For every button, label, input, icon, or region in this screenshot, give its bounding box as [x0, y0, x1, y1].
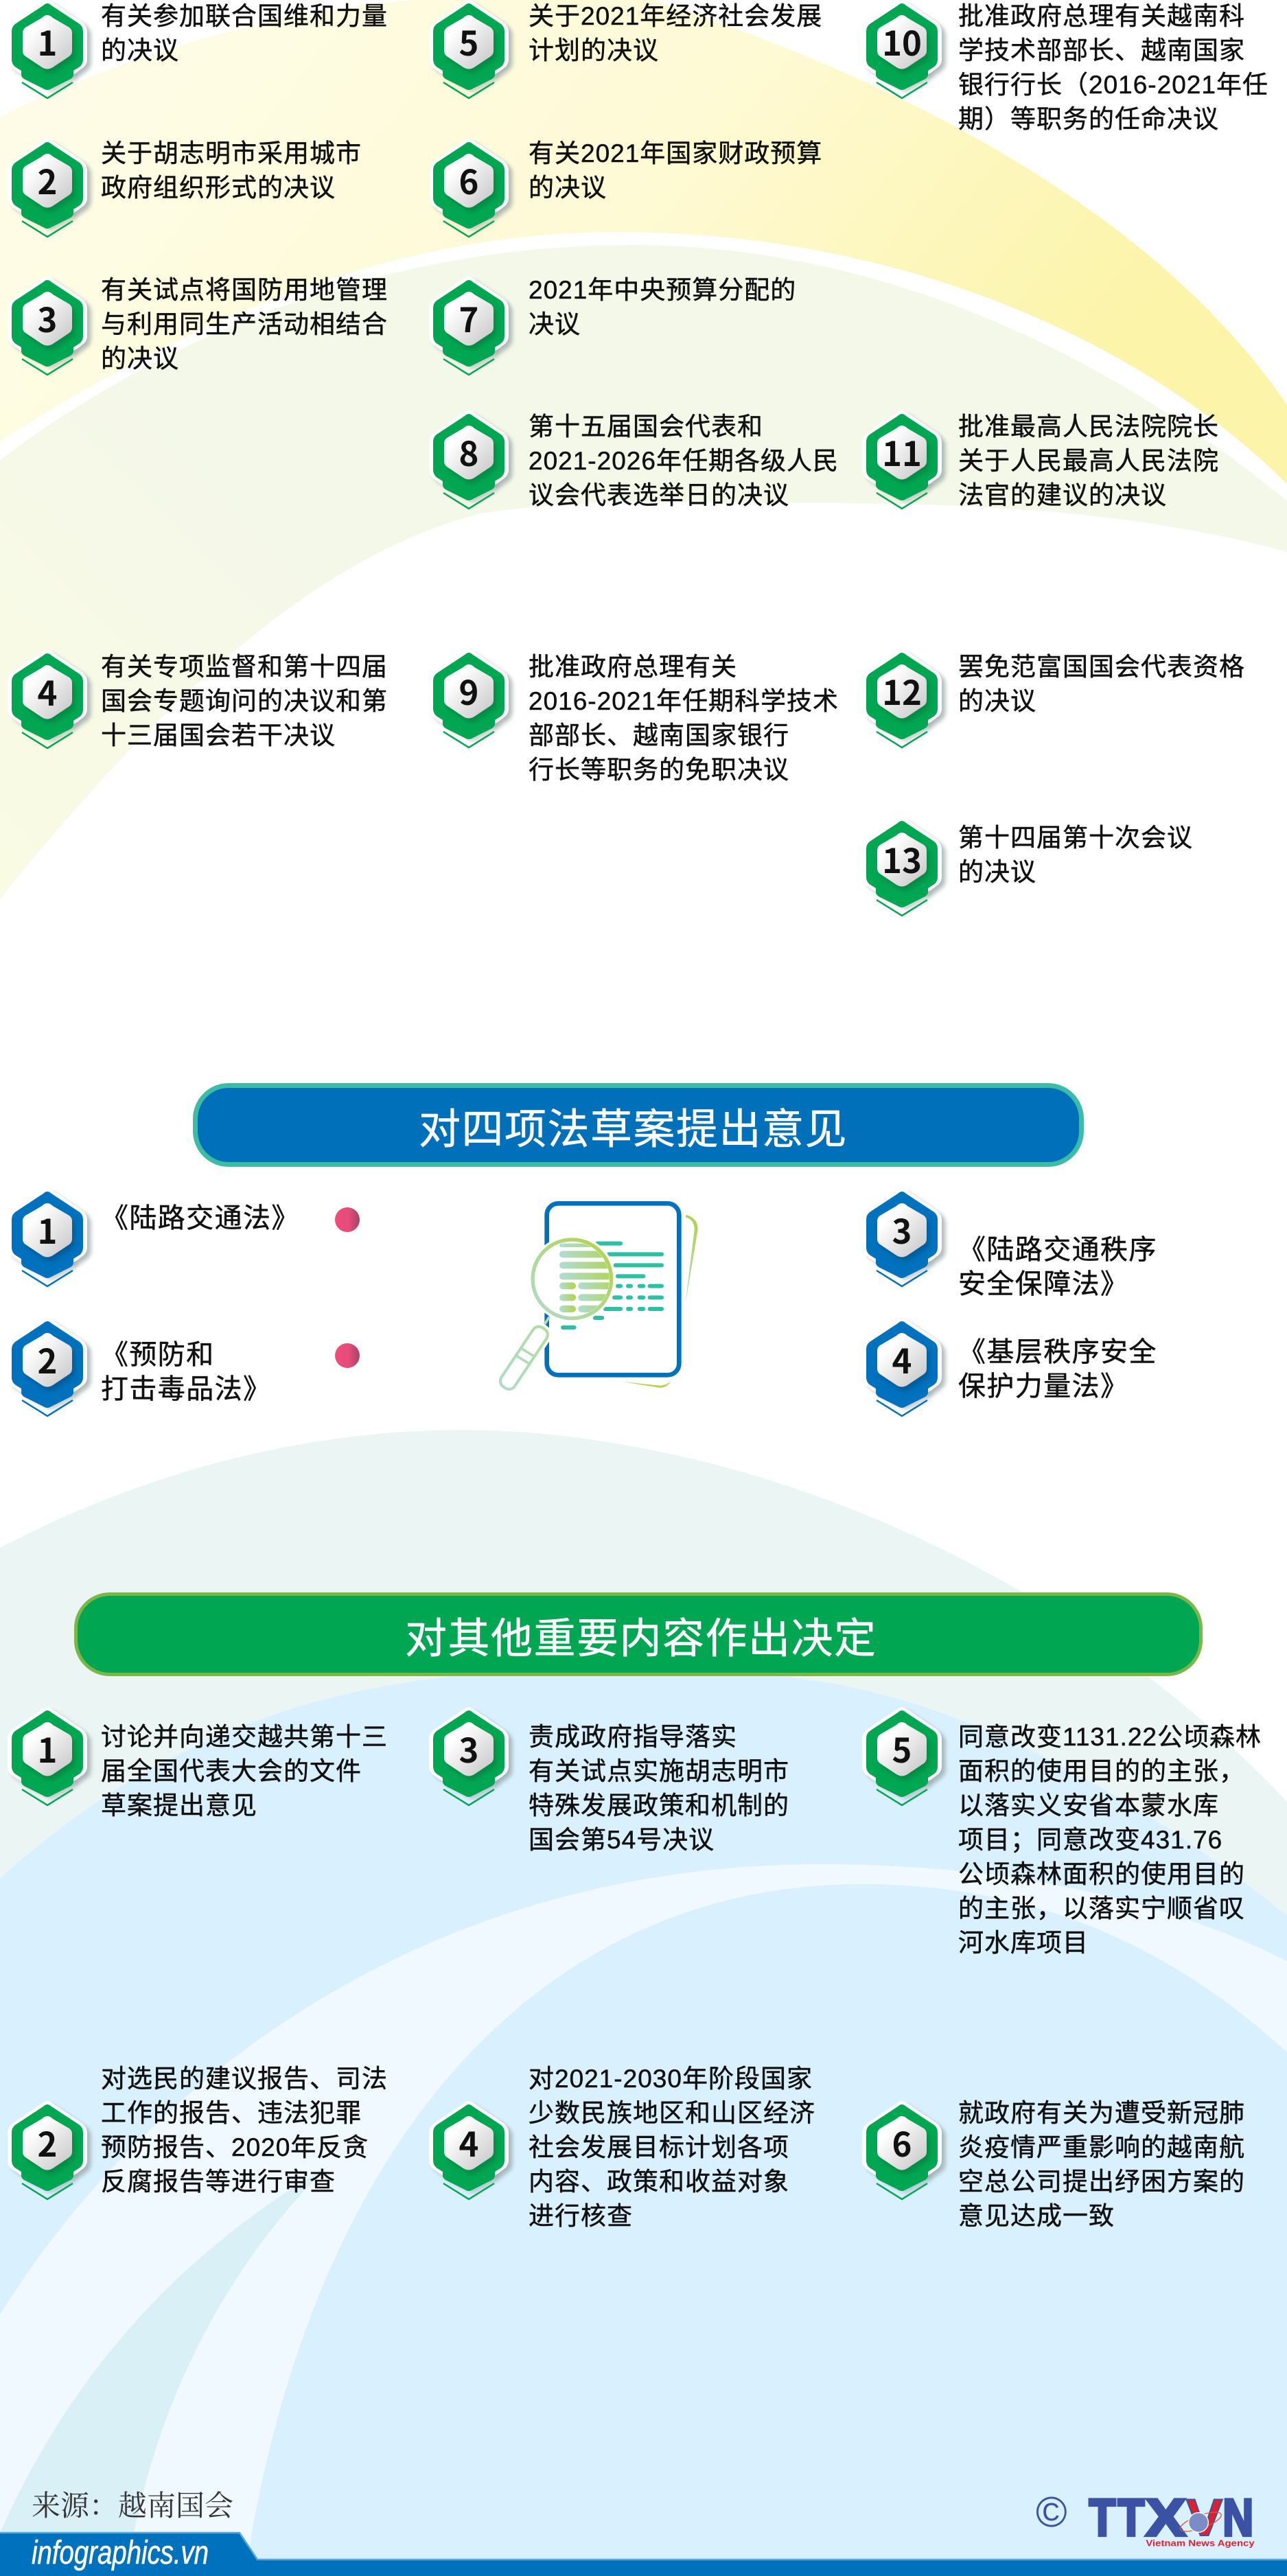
decision 6: 空总公司提出纾困方案的 — [958, 2168, 1245, 2196]
decision 6: 6 — [892, 2118, 912, 2167]
law 4: 《基层秩序安全 — [958, 1337, 1157, 1367]
decision 5: 5 — [892, 1724, 912, 1773]
logo: TTXVN: V — [1186, 2489, 1223, 2547]
item 10: 批准政府总理有关越南科 — [958, 2, 1245, 30]
item 5: 计划的决议 — [529, 36, 659, 65]
item 13: 13 — [882, 835, 922, 883]
item 3: 3 — [38, 294, 57, 343]
item 12: 12 — [882, 666, 922, 715]
item 13: 的决议 — [958, 858, 1036, 886]
decision 4: 社会发展目标计划各项 — [529, 2133, 789, 2161]
item 2: 关于胡志明市采用城市 — [101, 139, 362, 167]
logo: TTXVN: T — [1118, 2489, 1144, 2547]
decision 4: 4 — [459, 2118, 478, 2167]
decision 5: 面积的使用目的的主张， — [958, 1757, 1245, 1785]
item 4 — [8, 650, 388, 750]
decision 5: 公顷森林面积的使用目的 — [958, 1860, 1245, 1888]
item 9: 部部长、越南国家银行 — [529, 721, 789, 750]
law 1: 《陆路交通法》 — [101, 1203, 300, 1233]
item 5: 关于2021年经济社会发展 — [529, 2, 822, 30]
logo: TTXVN: Vietnam News Agency — [1146, 2538, 1255, 2548]
icon: document with magnifier — [498, 1201, 698, 1391]
decision 6 — [862, 2099, 1245, 2230]
item 1: 的决议 — [101, 36, 179, 65]
decision 2: 反腐报告等进行审查 — [101, 2168, 336, 2196]
item 8: 8 — [459, 428, 478, 476]
item 10: 银行行长（2016-2021年任 — [958, 71, 1268, 99]
decision 3: 责成政府指导落实 — [529, 1723, 737, 1751]
item 5: 5 — [459, 17, 478, 66]
item 8: 议会代表选举日的决议 — [529, 481, 789, 509]
logo: TTXVN: X — [1146, 2489, 1186, 2547]
item 7: 决议 — [529, 310, 581, 338]
decision 5 — [862, 1707, 1262, 1957]
law 3: 3 — [892, 1205, 912, 1254]
law 2: 《预防和 — [101, 1340, 215, 1370]
decision 6: 意见达成一致 — [958, 2202, 1115, 2230]
decision 6: 炎疫情严重影响的越南航 — [958, 2133, 1245, 2161]
decision 1: 讨论并向递交越共第十三 — [101, 1723, 388, 1751]
heading: four draft laws banner: 对四项法草案提出意见 — [419, 1106, 848, 1152]
law 2: 2 — [38, 1335, 57, 1384]
item 1: 1 — [38, 17, 57, 66]
law 3 — [865, 1190, 1157, 1299]
item 7: 7 — [459, 294, 478, 343]
decision 3: 国会第54号决议 — [529, 1826, 715, 1854]
item 3: 有关试点将国防用地管理 — [101, 276, 388, 304]
decision 2: 对选民的建议报告、司法 — [101, 2065, 388, 2093]
decision 1: 草案提出意见 — [101, 1791, 257, 1820]
item 6: 的决议 — [529, 174, 607, 202]
item 11 — [862, 410, 1219, 509]
logo: TTXVN — [1089, 2489, 1255, 2548]
item 4: 4 — [38, 667, 57, 716]
item 13: 第十四届第十次会议 — [958, 824, 1193, 852]
item 6: 有关2021年国家财政预算 — [529, 139, 822, 167]
item 9: 9 — [459, 666, 478, 715]
decision 1: 届全国代表大会的文件 — [101, 1757, 362, 1785]
item 8: 第十五届国会代表和 — [529, 413, 763, 441]
pink dot 2 — [335, 1343, 360, 1368]
item 12: 的决议 — [958, 687, 1036, 715]
item 4: 十三届国会若干决议 — [101, 721, 336, 750]
decision 2 — [8, 2065, 388, 2201]
item 8 — [429, 410, 839, 509]
item 6 — [429, 139, 822, 237]
law 1: 1 — [38, 1205, 57, 1254]
item 4: 国会专题询问的决议和第 — [101, 687, 388, 715]
pink dot 1 — [335, 1207, 360, 1232]
item 11: 关于人民最高人民法院 — [958, 447, 1219, 475]
item 10: 10 — [882, 17, 922, 66]
decision 6: 就政府有关为遭受新冠肺 — [958, 2099, 1245, 2127]
item 10 — [865, 1, 1268, 133]
decision 5: 项目；同意改变431.76 — [958, 1826, 1222, 1854]
law 4 — [865, 1319, 1157, 1417]
item 7 — [429, 276, 796, 376]
decision 3: 有关试点实施胡志明市 — [529, 1757, 789, 1785]
item 7: 2021年中央预算分配的 — [529, 276, 796, 304]
law 3: 安全保障法》 — [958, 1269, 1128, 1299]
item 11: 11 — [882, 428, 922, 476]
item 10: 期）等职务的任命决议 — [958, 105, 1219, 133]
site name: infographics.vn — [32, 2535, 209, 2571]
footer bar — [0, 2531, 1287, 2576]
decision 2: 2 — [38, 2118, 57, 2167]
item 5 — [429, 0, 822, 99]
item 13 — [865, 820, 1193, 917]
law 1 — [10, 1190, 300, 1288]
decision 3 — [429, 1707, 789, 1854]
item 12: 罢免范富国国会代表资格 — [958, 653, 1245, 681]
item 9: 行长等职务的免职决议 — [529, 756, 789, 784]
item 1: 有关参加联合国维和力量 — [101, 2, 388, 30]
law 4: 4 — [892, 1335, 912, 1384]
item 3 — [8, 276, 388, 376]
item 2 — [8, 139, 362, 237]
decision 1: 1 — [38, 1724, 57, 1773]
law 3: 《陆路交通秩序 — [958, 1235, 1157, 1265]
decision 2: 工作的报告、违法犯罪 — [101, 2099, 362, 2127]
heading: four draft laws banner — [193, 1083, 1084, 1167]
source text: 来源：越南国会 — [32, 2491, 233, 2522]
decision 5: 的主张，以落实宁顺省叹 — [958, 1894, 1245, 1923]
law 4: 保护力量法》 — [958, 1371, 1128, 1402]
item 3: 的决议 — [101, 345, 179, 373]
heading: other decisions banner — [74, 1592, 1203, 1676]
law 2: 打击毒品法》 — [101, 1374, 271, 1404]
item 6: 6 — [459, 156, 478, 205]
decision 5: 以落实义安省本蒙水库 — [958, 1791, 1219, 1820]
item 9 — [432, 651, 839, 784]
item 10: 学技术部部长、越南国家 — [958, 36, 1245, 65]
item 2: 2 — [38, 156, 57, 205]
item 12 — [865, 651, 1245, 748]
logo: TTXVN: N — [1222, 2489, 1253, 2547]
decision 5: 同意改变1131.22公顷森林 — [958, 1723, 1262, 1751]
item 11: 法官的建议的决议 — [958, 481, 1167, 509]
item 11: 批准最高人民法院院长 — [958, 413, 1219, 441]
logo: TTXVN: T — [1089, 2489, 1115, 2547]
item 8: 2021-2026年任期各级人民 — [529, 447, 839, 475]
item 3: 与利用同生产活动相结合 — [101, 310, 388, 338]
item 1 — [10, 1, 388, 99]
decision 5: 河水库项目 — [958, 1929, 1089, 1957]
decision 4 — [429, 2065, 815, 2230]
item 4: 有关专项监督和第十四届 — [101, 653, 388, 681]
decision 4: 少数民族地区和山区经济 — [529, 2099, 815, 2127]
item 9: 2016-2021年任期科学技术 — [529, 687, 839, 715]
item 2: 政府组织形式的决议 — [101, 174, 336, 202]
decision 1 — [8, 1707, 388, 1820]
law 2 — [10, 1319, 271, 1417]
item 9: 批准政府总理有关 — [529, 653, 737, 681]
heading: other decisions banner: 对其他重要内容作出决定 — [405, 1615, 877, 1662]
decision 4: 进行核查 — [529, 2202, 633, 2230]
decision 4: 对2021-2030年阶段国家 — [529, 2065, 813, 2093]
decision 4: 内容、政策和收益对象 — [529, 2168, 789, 2196]
decision 3: 3 — [459, 1724, 478, 1773]
decision 2: 预防报告、2020年反贪 — [101, 2133, 369, 2161]
decision 3: 特殊发展政策和机制的 — [529, 1791, 789, 1820]
copyright symbol: © — [1036, 2489, 1067, 2536]
